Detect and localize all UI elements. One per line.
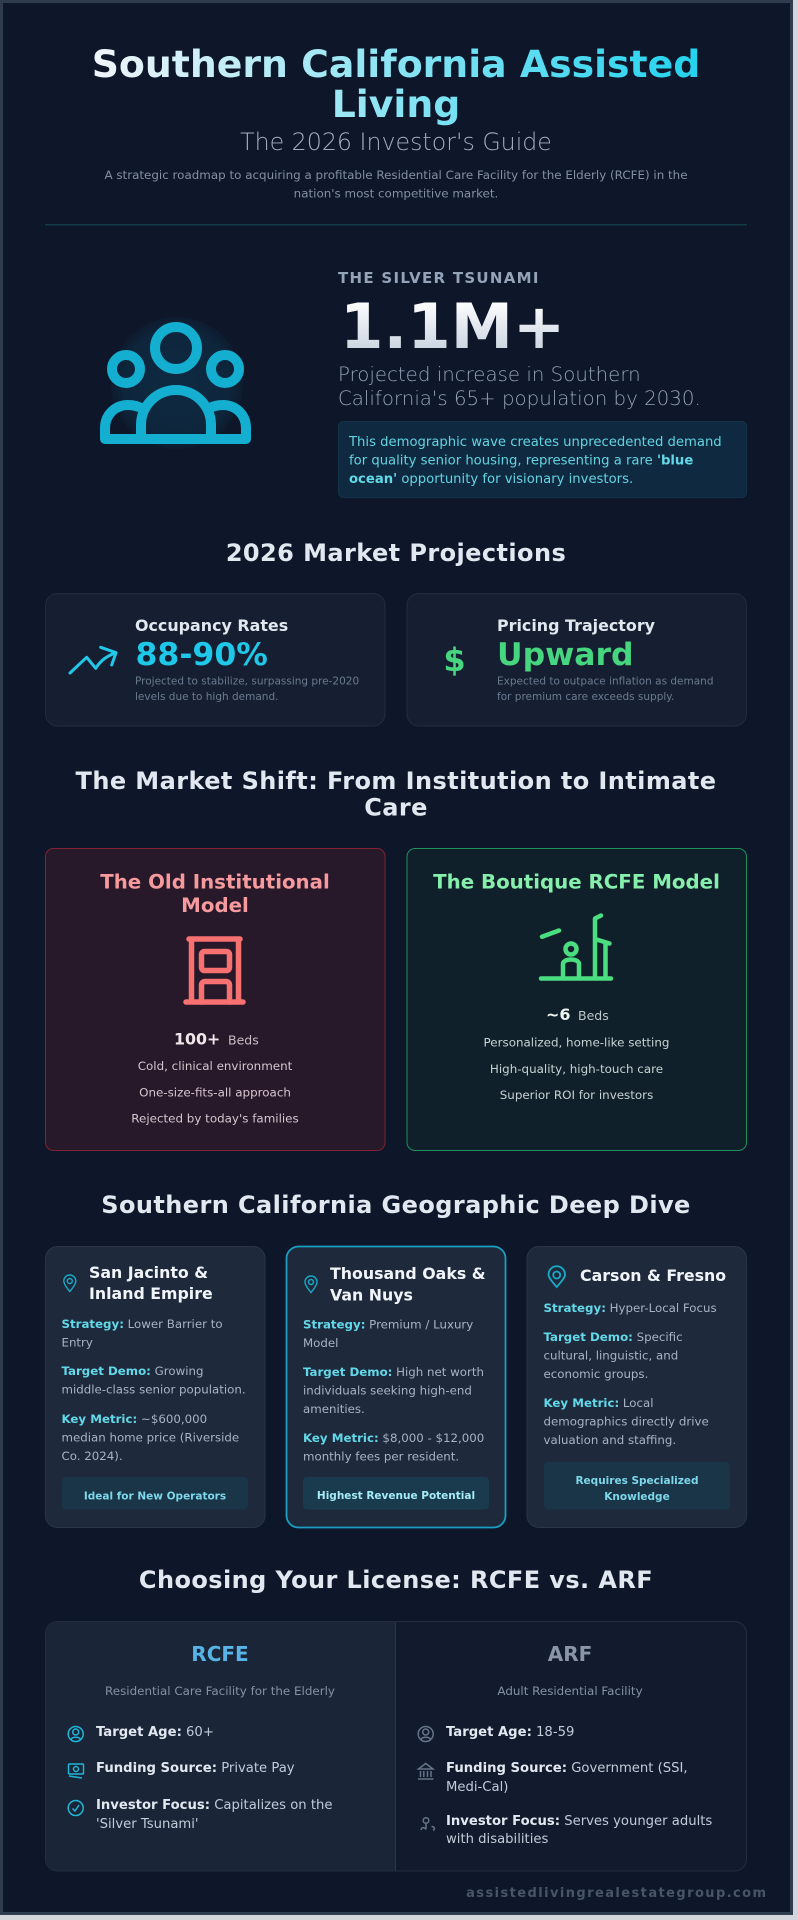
- callout: This demographic wave creates unprecedented demand: [348, 435, 722, 450]
- details: Strategy: Lower Barrier to: [62, 1317, 223, 1331]
- heading: market projections: 2026 Market Projections: [226, 539, 566, 567]
- icon: pin: [64, 1275, 76, 1292]
- stat: Beds: [578, 1008, 609, 1023]
- column: ARF: Funding Source: Government (SSI,: [446, 1761, 688, 1776]
- details: cultural, linguistic, and: [544, 1348, 678, 1362]
- icon: user: [68, 1726, 83, 1742]
- details: individuals seeking high-end: [303, 1384, 472, 1398]
- stat: Beds: [228, 1032, 259, 1048]
- note: [135, 676, 359, 703]
- badge: Highest Revenue Potential: [317, 1490, 475, 1502]
- location name: San Jacinto &: [89, 1263, 208, 1282]
- badge: [303, 1477, 489, 1510]
- list: Cold, clinical environment: [138, 1059, 293, 1073]
- icon: user: [418, 1726, 433, 1742]
- stat: [174, 1030, 259, 1048]
- icon: group of people: [105, 317, 246, 449]
- icon: pin: [548, 1266, 565, 1287]
- icon: money: [68, 1764, 84, 1778]
- details: [544, 1301, 717, 1447]
- details: Target Demo: Specific: [544, 1330, 683, 1344]
- column: ARF: Investor Focus: Serves younger adults: [446, 1814, 712, 1829]
- heading: market shift: Care: [364, 794, 428, 822]
- note: Projected to stabilize, surpassing pre-2020: [135, 676, 359, 688]
- heading: geographic deep dive: Southern California Geographic Deep Dive: [101, 1191, 691, 1219]
- callout: [338, 422, 746, 498]
- details: economic groups.: [544, 1367, 648, 1381]
- location name: Carson & Fresno: [580, 1266, 726, 1285]
- column: RCFE: RCFE: [191, 1642, 249, 1666]
- list: Superior ROI for investors: [500, 1088, 653, 1102]
- details: [303, 1318, 484, 1464]
- list: [131, 1059, 299, 1126]
- details: Co. 2024).: [62, 1449, 123, 1463]
- details: middle-class senior population.: [62, 1382, 246, 1396]
- heading: Model: [181, 894, 249, 917]
- panel: license comparison: [46, 1622, 746, 1871]
- details: [62, 1317, 246, 1463]
- icon: trend arrow: [70, 647, 116, 673]
- list: Rejected by today's families: [131, 1112, 299, 1126]
- panel: institutional model: [46, 848, 385, 1150]
- heading: The Old Institutional: [100, 870, 330, 894]
- details: amenities.: [303, 1402, 365, 1416]
- details: monthly fees per resident.: [303, 1450, 459, 1464]
- details: Strategy: Premium / Luxury: [303, 1318, 473, 1332]
- description: California's 65+ population by 2030.: [338, 387, 701, 410]
- description: Projected increase in Southern: [338, 363, 641, 386]
- heading: choosing license: Choosing Your License: RCFE vs. ARF: [139, 1566, 653, 1594]
- column: ARF: Medi-Cal): [446, 1780, 508, 1795]
- details: demographics directly drive: [544, 1414, 709, 1428]
- heading: market shift: [76, 767, 716, 822]
- column: RCFE: Investor Focus: Capitalizes on the: [96, 1798, 332, 1813]
- icon: dollar: $: [443, 641, 466, 679]
- list: One-size-fits-all approach: [139, 1086, 291, 1100]
- icon: check: [68, 1800, 83, 1816]
- details: Model: [303, 1336, 338, 1350]
- column: ARF: with disabilities: [446, 1832, 548, 1847]
- location name: Inland Empire: [89, 1284, 213, 1303]
- column: RCFE: Funding Source: Private Pay: [96, 1761, 295, 1776]
- note: [497, 676, 714, 703]
- card: pricing: [407, 594, 746, 726]
- title second line: Living: [332, 82, 460, 126]
- details: Target Demo: High net worth: [303, 1365, 484, 1379]
- header: [92, 42, 700, 200]
- badge: [544, 1462, 730, 1510]
- details: Strategy: Hyper-Local Focus: [544, 1301, 717, 1315]
- column: RCFE: 'Silver Tsunami': [96, 1817, 199, 1832]
- icon: home with person: [541, 916, 611, 978]
- callout: for quality senior housing, representing a rare 'blue: [349, 454, 693, 468]
- location name: [330, 1264, 486, 1304]
- location name: Van Nuys: [330, 1286, 413, 1304]
- footer url: assistedlivingrealestategroup.com: [466, 1886, 768, 1901]
- heading: The Boutique RCFE Model: [433, 870, 720, 894]
- subtitle: The 2026 Investor's Guide: [240, 128, 552, 156]
- details: Key Metric: Local: [544, 1396, 654, 1410]
- icon: institution building: [186, 939, 243, 1002]
- card: San Jacinto: [46, 1246, 265, 1528]
- callout: ocean' opportunity for visionary investors.: [349, 472, 633, 487]
- icon: scale: [421, 1818, 434, 1830]
- column: RCFE: [68, 1642, 335, 1832]
- location name: [89, 1263, 213, 1303]
- note: levels due to high demand.: [135, 691, 278, 703]
- details: valuation and staffing.: [544, 1433, 676, 1447]
- badge: Knowledge: [604, 1491, 670, 1503]
- list: [484, 1036, 669, 1102]
- column: RCFE: Target Age: 60+: [96, 1725, 214, 1740]
- badge: Ideal for New Operators: [84, 1490, 226, 1502]
- panel: boutique model: [407, 848, 746, 1150]
- card: Thousand Oaks: [286, 1246, 506, 1528]
- column: RCFE: Residential Care Facility for the Elderly: [105, 1684, 335, 1698]
- section label: THE SILVER TSUNAMI: [338, 269, 540, 287]
- label: Pricing Trajectory: [497, 616, 656, 635]
- stat: ~6: [546, 1005, 571, 1024]
- list: Personalized, home-like setting: [484, 1036, 669, 1050]
- intro text: A strategic roadmap to acquiring a profitable Residential Care Facility for the Elderly (RCFE) in the: [104, 168, 688, 182]
- intro text: [104, 168, 688, 200]
- icon: bank: [418, 1764, 434, 1779]
- heading: [100, 870, 330, 917]
- note: for premium care exceeds supply.: [497, 691, 674, 703]
- badge: Requires Specialized: [575, 1475, 699, 1487]
- value: 88-90%: [136, 637, 268, 673]
- stat: [546, 1005, 609, 1024]
- title: Southern California Assisted: [92, 42, 700, 86]
- value: Upward: [497, 637, 634, 673]
- heading: market shift: The Market Shift: From Institution to Intimate: [76, 767, 716, 795]
- details: Target Demo: Growing: [62, 1364, 204, 1378]
- big number: 1.1M+: [340, 290, 565, 363]
- location name: Thousand Oaks &: [330, 1264, 486, 1283]
- column: ARF: Target Age: 18-59: [446, 1725, 574, 1740]
- list: High-quality, high-touch care: [490, 1062, 663, 1076]
- hero: silver tsunami: [105, 269, 746, 498]
- details: Key Metric: ~$600,000: [62, 1412, 207, 1426]
- description: [338, 363, 701, 410]
- note: Expected to outpace inflation as demand: [497, 676, 714, 688]
- intro text: nation's most competitive market.: [294, 186, 498, 200]
- column: ARF: ARF: [548, 1642, 592, 1666]
- details: Key Metric: $8,000 - $12,000: [303, 1431, 484, 1445]
- details: Entry: [62, 1336, 93, 1350]
- stat: 100+: [174, 1030, 220, 1048]
- column: ARF: [418, 1642, 712, 1847]
- icon: pin: [305, 1276, 317, 1292]
- details: median home price (Riverside: [62, 1430, 239, 1444]
- label: Occupancy Rates: [135, 616, 288, 635]
- badge: [62, 1477, 248, 1510]
- card: Carson and Fresno: [527, 1246, 746, 1528]
- column: ARF: Adult Residential Facility: [497, 1684, 643, 1698]
- card: occupancy: [46, 594, 385, 726]
